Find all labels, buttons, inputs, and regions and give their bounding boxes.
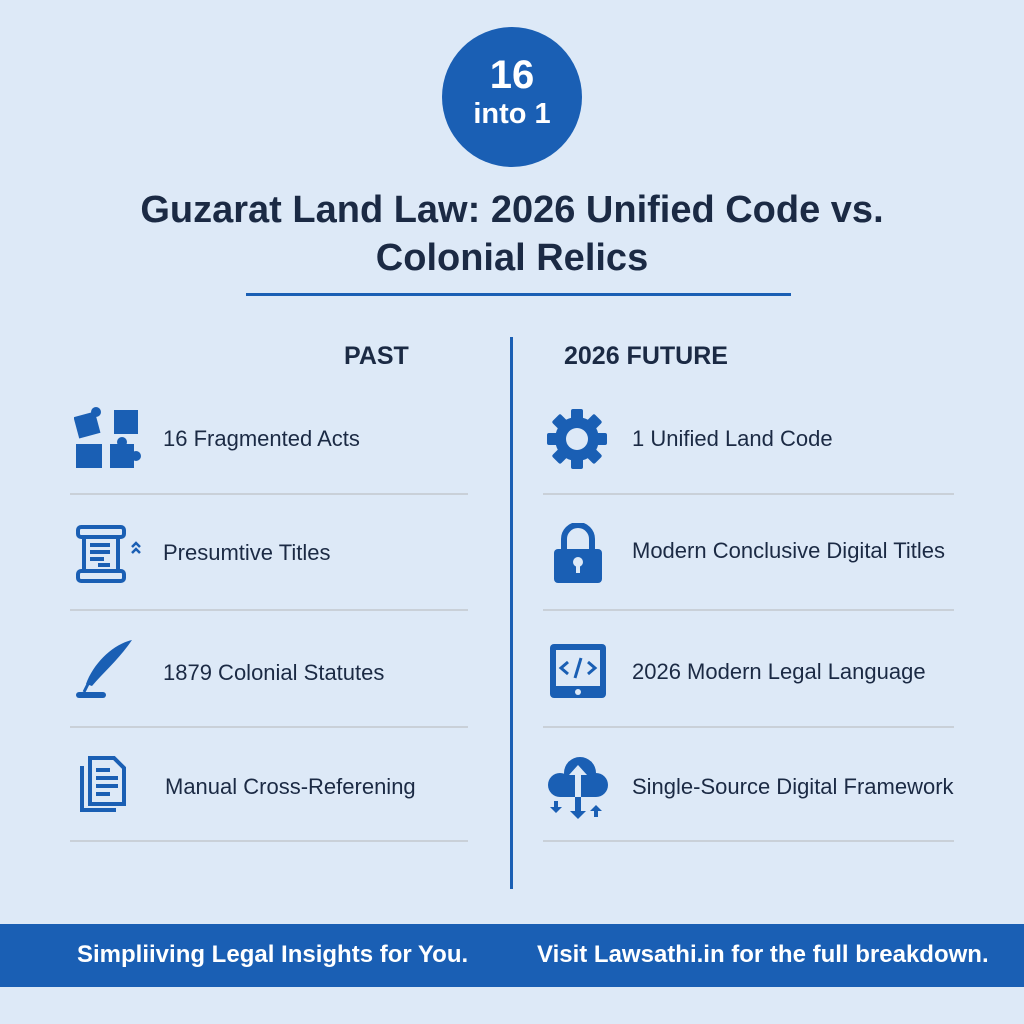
- title underline: [246, 293, 791, 296]
- panel: future: [543, 342, 954, 842]
- panel: past: Presumtive Titles: [163, 540, 330, 565]
- badge: 16 into 1: into 1: [473, 98, 551, 130]
- title: [140, 189, 884, 279]
- panel: future: 1 Unified Land Code: [632, 426, 833, 451]
- footer right text: Visit Lawsathi.in for the full breakdown.: [537, 941, 989, 968]
- panel: future: 2026 Modern Legal Language: [632, 659, 926, 684]
- panel: past: 16 Fragmented Acts: [163, 426, 360, 451]
- icon: code tablet: [550, 644, 606, 698]
- title: Colonial Relics: [376, 237, 648, 279]
- icon: gear: [547, 409, 607, 469]
- badge: 16 into 1: [442, 27, 582, 167]
- heading: past: PAST: [344, 342, 409, 370]
- center divider: [510, 337, 513, 889]
- icon: scroll: [76, 525, 141, 583]
- icon: puzzle: [74, 407, 141, 468]
- icon: cloud: [548, 757, 608, 819]
- icon: quill: [76, 640, 132, 698]
- panel: past: [70, 342, 468, 842]
- footer banner: [0, 924, 1024, 987]
- panel: future: Single-Source Digital Framework: [632, 774, 954, 799]
- panel: future: Modern Conclusive Digital Titles: [632, 538, 945, 563]
- heading: future: 2026 FUTURE: [564, 342, 728, 370]
- badge: 16 into 1: 16: [490, 53, 534, 97]
- title: Guzarat Land Law: 2026 Unified Code vs.: [140, 189, 884, 231]
- icon: documents: [80, 756, 126, 812]
- panel: past: 1879 Colonial Statutes: [163, 660, 384, 685]
- panel: past: Manual Cross-Referening: [165, 774, 416, 799]
- footer left text: Simpliiving Legal Insights for You.: [77, 941, 468, 968]
- icon: lock: [554, 523, 602, 583]
